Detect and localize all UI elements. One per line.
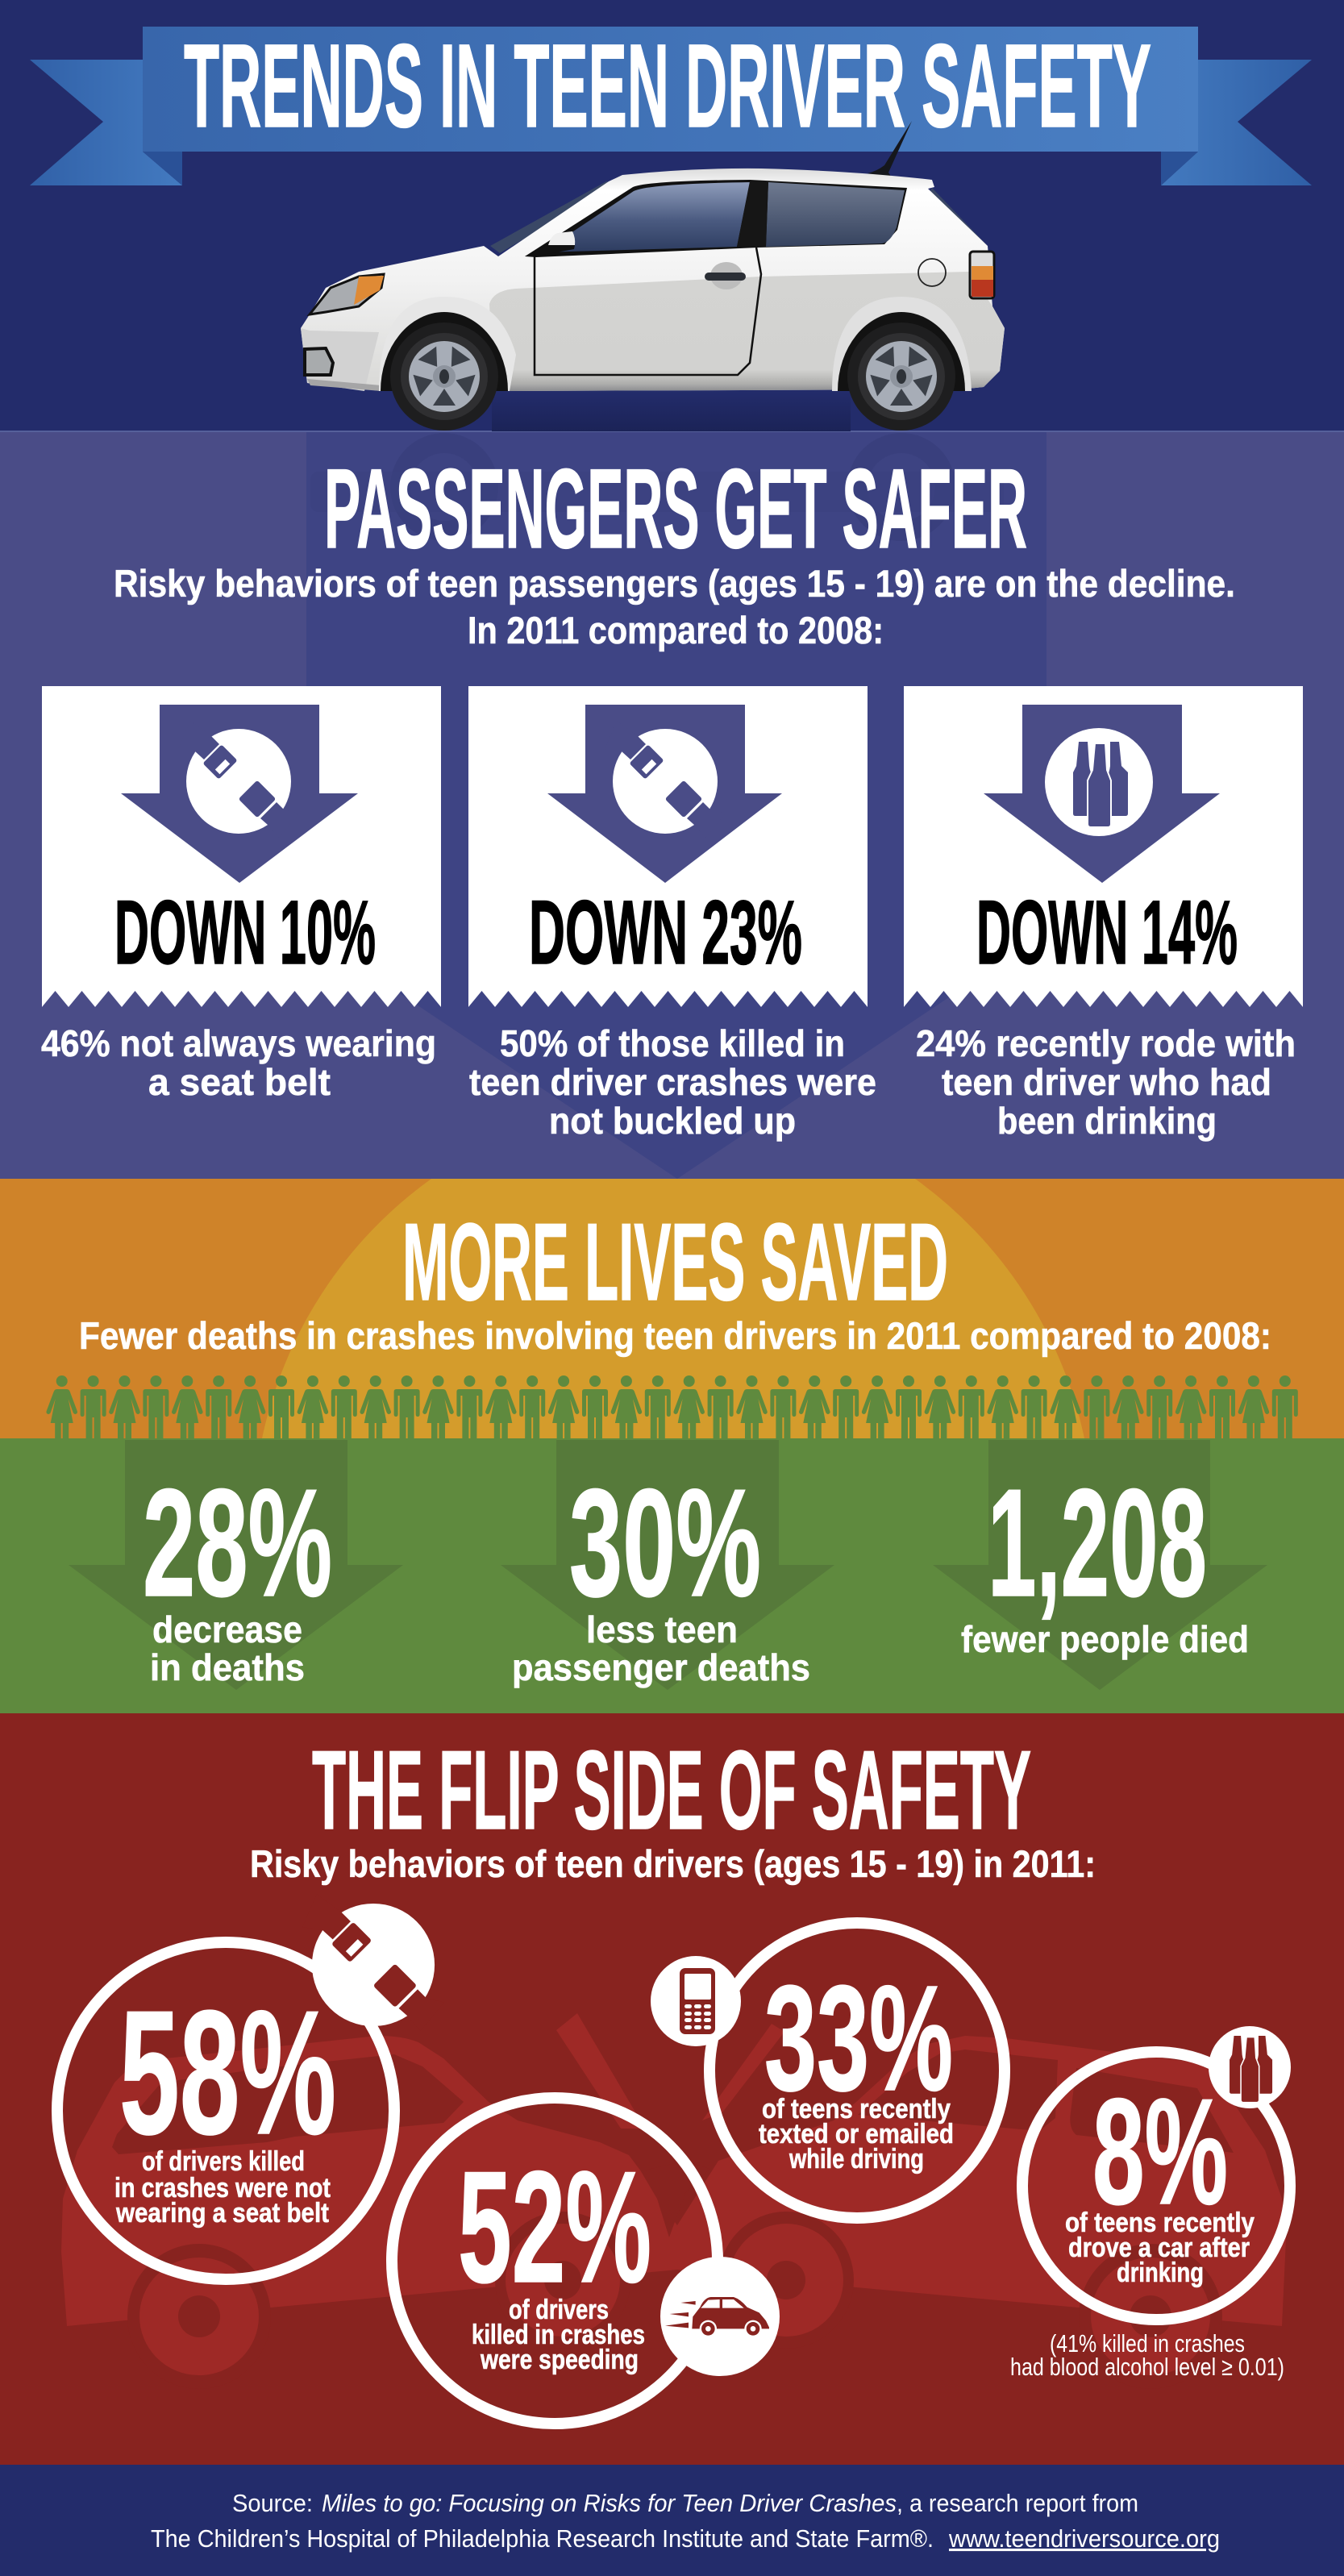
- footer source text: The Children’s Hospital of Philadelphia Research Institute and State Farm®.: [151, 2524, 934, 2553]
- description: [114, 2146, 331, 2229]
- footer source text: Miles to go: Focusing on Risks for Teen Driver Crashes: [322, 2489, 897, 2517]
- caption: seat belt: 46% not always wearing: [41, 1022, 436, 1064]
- icon: white car: [301, 121, 1005, 431]
- panel: flip side background: [0, 1713, 1344, 2465]
- footer source text: Source:: [232, 2489, 313, 2517]
- stat circle: 33% texting: [651, 1923, 1005, 2218]
- description: of drivers: [509, 2295, 609, 2325]
- arrow: [121, 705, 358, 883]
- crashed cars silhouette: [61, 2013, 1286, 2389]
- figure: 52%: [458, 2138, 651, 2316]
- panel: card down 10%: [42, 686, 441, 1007]
- stat: 28%: 28%: [143, 1458, 332, 1629]
- icon: seat belt: [302, 1894, 444, 2031]
- car reflection: [310, 433, 1004, 541]
- caption: not buckled: 50% of those killed in: [500, 1022, 845, 1064]
- front wheel: [390, 323, 498, 431]
- icon: seat belt: [605, 721, 726, 838]
- caption: drinking: been drinking: [997, 1100, 1217, 1142]
- stat circle: 8% drinking: [1022, 2026, 1291, 2320]
- panel: card down 23%: [468, 686, 868, 1007]
- caption: drinking: 24% recently rode with: [916, 1022, 1296, 1064]
- icon: seat belt: [178, 721, 299, 838]
- text: passengers intro: Risky behaviors of teen passengers (ages 15 - 19) are on the decline.: [114, 562, 1235, 605]
- text: flip side intro: Risky behaviors of teen drivers (ages 15 - 19) in 2011:: [250, 1842, 1096, 1885]
- icon: speeding car: [660, 2257, 780, 2376]
- stat: 28%: [143, 1458, 332, 1688]
- stat: 30%: less teen: [586, 1608, 738, 1650]
- figure: DOWN 10%: [114, 882, 376, 983]
- stat: 30%: passenger deaths: [512, 1646, 810, 1688]
- caption: drinking: teen driver who had: [942, 1061, 1271, 1103]
- headlight: [310, 274, 384, 314]
- description: in crashes were not: [114, 2173, 331, 2204]
- tail light: [970, 252, 994, 298]
- figure: 58%: [119, 1975, 336, 2171]
- description: texted or emailed: [759, 2119, 954, 2149]
- description: were speeding: [480, 2345, 639, 2375]
- description: of drivers killed: [142, 2146, 305, 2177]
- text: passengers intro: In 2011 compared to 2008:: [468, 609, 884, 651]
- rear window: [766, 182, 905, 247]
- caption: not buckled: teen driver crashes were: [469, 1061, 876, 1103]
- antenna: [868, 121, 912, 177]
- door handle: [710, 262, 743, 289]
- background: navy header band: [0, 0, 1344, 431]
- description: of teens recently: [1065, 2208, 1255, 2238]
- panel: more lives saved background: [0, 1179, 1344, 1438]
- figure: 8%: [1092, 2067, 1228, 2236]
- wheel arch trim: [379, 297, 516, 391]
- panel: title ribbon: [30, 27, 1312, 185]
- arrow: [984, 705, 1220, 883]
- description: of teens recently: [762, 2094, 951, 2124]
- front window: [542, 182, 750, 252]
- side mirror: [525, 244, 575, 256]
- figure: 33%: [764, 1955, 953, 2122]
- stat circle: 52% speeding: [392, 2098, 780, 2424]
- panel: green statistics background: [0, 1438, 1344, 1713]
- description: [759, 2094, 954, 2174]
- icon: phone: [651, 1956, 741, 2046]
- description: drove a car after: [1068, 2233, 1250, 2263]
- fuel cap: [918, 259, 946, 286]
- caption: not buckled: not buckled up: [549, 1100, 796, 1142]
- fog lamp: [305, 348, 333, 375]
- people row: [46, 1375, 1298, 1439]
- text: passengers intro: [114, 562, 1235, 651]
- rear wheel: [847, 323, 955, 431]
- panel: card down 14%: [904, 686, 1303, 1007]
- panel: passengers get safer background: [0, 431, 1344, 1179]
- footer source text: www.teendriversource.org: [948, 2524, 1220, 2553]
- stat circle: 58% seat belt: [57, 1894, 444, 2279]
- wheel arches: [381, 312, 508, 391]
- note: blood alcohol: had blood alcohol level ≥ 0.01): [1010, 2353, 1284, 2381]
- caption: drinking: [916, 1022, 1296, 1142]
- ground shadow under car: [492, 391, 851, 431]
- description: wearing a seat belt: [115, 2198, 329, 2229]
- stat: 28%: decrease: [152, 1608, 302, 1650]
- icon: bottles: [1209, 2026, 1291, 2108]
- description: [1065, 2208, 1255, 2288]
- door outline: [535, 248, 761, 375]
- footer source text: , a research report from: [897, 2489, 1138, 2517]
- description: while driving: [789, 2144, 924, 2174]
- footer background: [0, 2465, 1344, 2576]
- caption: seat belt: a seat belt: [148, 1061, 331, 1103]
- note: blood alcohol: [1010, 2329, 1284, 2381]
- description: [472, 2295, 645, 2375]
- caption: seat belt: [41, 1022, 436, 1103]
- description: killed in crashes: [472, 2320, 645, 2350]
- icon: bottles: [1045, 728, 1153, 836]
- window frames: [525, 180, 907, 257]
- arrow: [547, 705, 782, 883]
- stat: 30%: 30%: [569, 1458, 761, 1629]
- figure: DOWN 23%: [529, 882, 802, 983]
- stat: 28%: in deaths: [150, 1646, 305, 1688]
- lower body shading: [489, 272, 1005, 391]
- stat: 1,208: [961, 1458, 1249, 1660]
- caption: not buckled: [469, 1022, 876, 1142]
- note: blood alcohol: (41% killed in crashes: [1050, 2329, 1245, 2358]
- stat: 30%: [512, 1458, 810, 1688]
- footer source text: [151, 2489, 1220, 2553]
- description: drinking: [1117, 2258, 1204, 2288]
- stat: 1,208: fewer people died: [961, 1618, 1249, 1660]
